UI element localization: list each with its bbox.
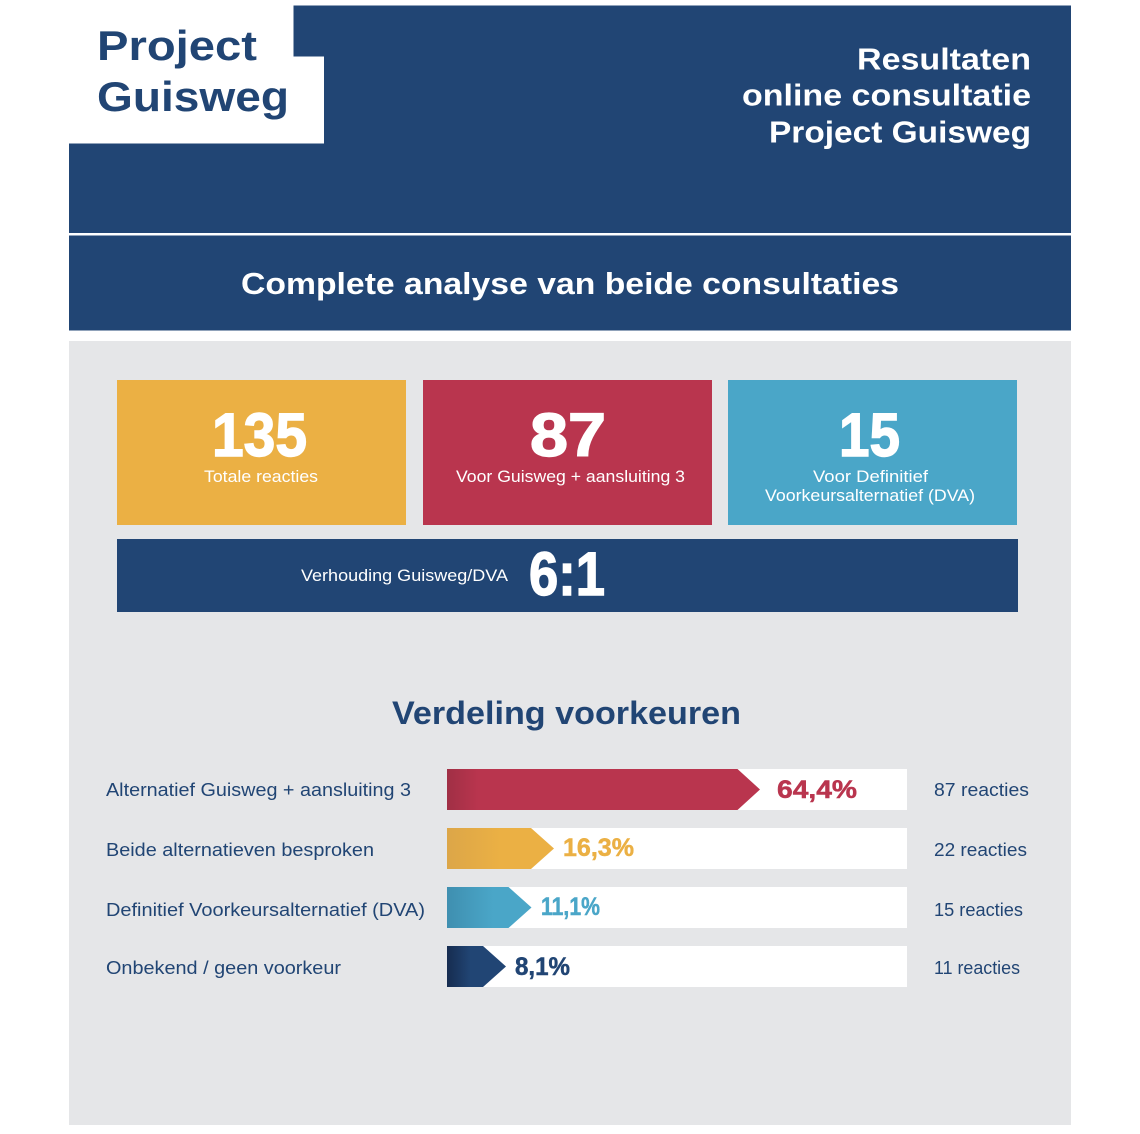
row: both alternatives: 16,3% bbox=[563, 834, 634, 862]
row: both alternatives bbox=[106, 828, 1027, 869]
stat card: DVA: Voorkeursalternatief (DVA) bbox=[765, 486, 975, 505]
stat card: DVA: Voor Definitief bbox=[813, 467, 928, 486]
report title: Resultaten bbox=[857, 42, 1031, 76]
row: unknown bbox=[106, 946, 1020, 987]
row: DVA bbox=[106, 887, 1023, 928]
row: unknown: 8,1% bbox=[515, 953, 570, 981]
stat card: total responses: 135 bbox=[212, 401, 307, 469]
row: DVA: Definitief Voorkeursalternatief (DVA) bbox=[106, 900, 425, 920]
project logo title bbox=[97, 22, 289, 120]
row: both alternatives: 22 reacties bbox=[934, 840, 1027, 860]
ratio bar bbox=[117, 539, 1018, 612]
ratio bar: Verhouding Guisweg/DVA bbox=[301, 566, 509, 585]
row: both alternatives: Beide alternatieven besproken bbox=[106, 840, 374, 860]
row: DVA: 15 reacties bbox=[934, 900, 1023, 920]
row: unknown: 11 reacties bbox=[934, 958, 1020, 978]
chart heading: Verdeling voorkeuren bbox=[392, 695, 741, 731]
row: Guisweg + aansluiting 3: 64,4% bbox=[777, 776, 857, 804]
stat card: Guisweg: 87 bbox=[530, 401, 606, 469]
project logo title: Guisweg bbox=[97, 73, 289, 120]
stat card: total responses: Totale reacties bbox=[204, 467, 318, 486]
bar chart bbox=[106, 769, 1029, 987]
report title: Project Guisweg bbox=[769, 114, 1031, 150]
project logo title: Project bbox=[97, 22, 257, 69]
row: Guisweg + aansluiting 3: 87 reacties bbox=[934, 780, 1029, 800]
subtitle banner bbox=[69, 236, 1071, 330]
report title: online consultatie bbox=[742, 78, 1031, 112]
stat card: DVA: 15 bbox=[839, 401, 900, 469]
stat card: Guisweg bbox=[423, 380, 712, 525]
row: Guisweg + aansluiting 3 bbox=[106, 769, 1029, 810]
panel: results background bbox=[69, 341, 1071, 1125]
row: unknown: Onbekend / geen voorkeur bbox=[106, 958, 341, 978]
ratio bar: 6:1 bbox=[529, 540, 605, 608]
subtitle banner: Complete analyse van beide consultaties bbox=[241, 266, 899, 301]
stat card: total responses bbox=[117, 380, 406, 525]
row: Guisweg + aansluiting 3: Alternatief Guisweg + aansluiting 3 bbox=[106, 780, 411, 800]
stat card: Guisweg: Voor Guisweg + aansluiting 3 bbox=[456, 467, 685, 486]
header banner bbox=[69, 6, 1071, 233]
stat card: DVA bbox=[728, 380, 1017, 525]
report title bbox=[742, 42, 1031, 150]
row: DVA: 11,1% bbox=[541, 893, 600, 921]
